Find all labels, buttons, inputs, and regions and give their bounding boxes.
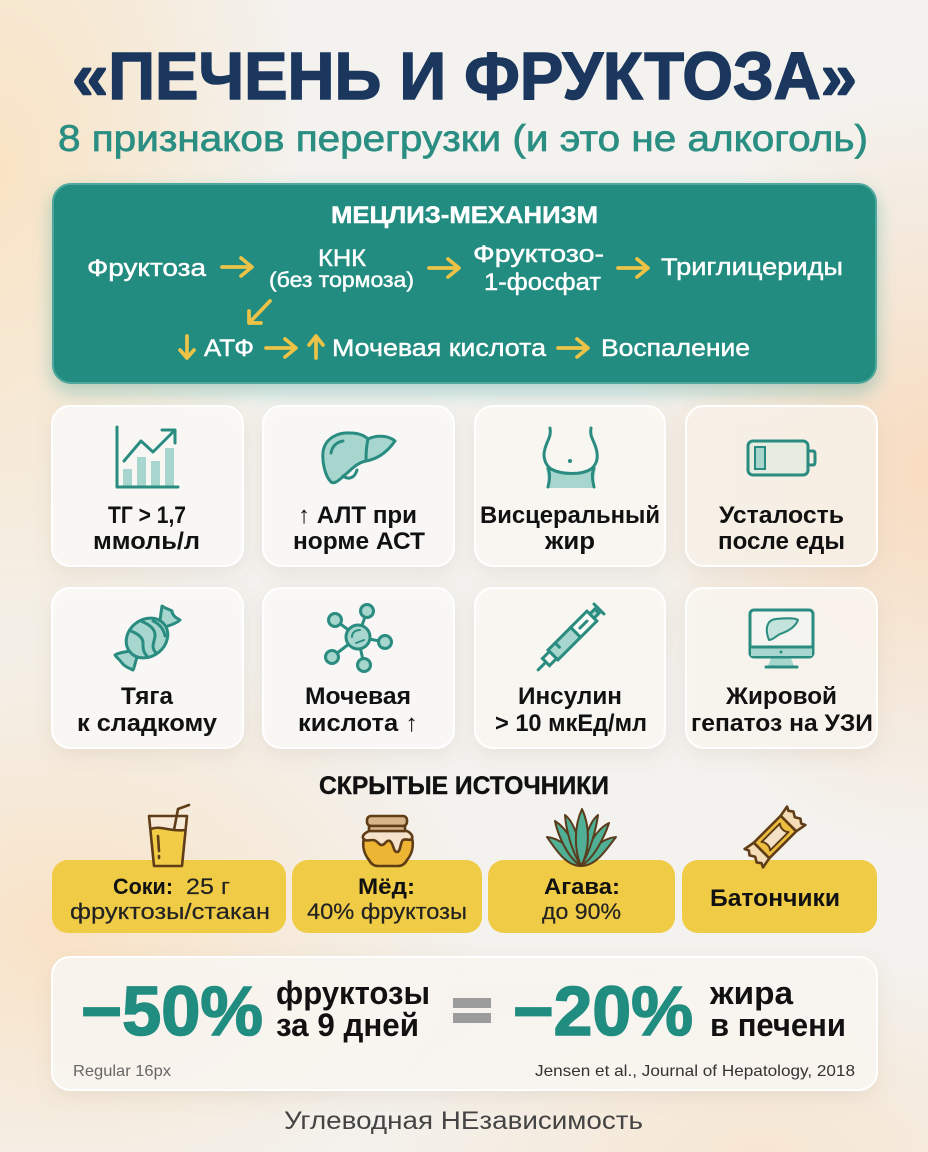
card: fatigue bbox=[686, 406, 877, 566]
arrow bbox=[429, 259, 459, 277]
label: ↑ АЛТ при bbox=[298, 502, 417, 529]
card: ALT bbox=[263, 406, 454, 566]
label: Мочевая bbox=[305, 683, 411, 710]
title: «ПЕЧЕНЬ И ФРУКТОЗА» bbox=[72, 39, 857, 114]
label: к сладкому bbox=[77, 710, 218, 737]
label: Тяга bbox=[121, 683, 174, 710]
note: Regular 16px bbox=[73, 1063, 171, 1080]
label: Жировой bbox=[725, 683, 837, 710]
arrow bbox=[618, 259, 648, 277]
icon: candy bbox=[115, 606, 180, 670]
section heading: hidden sources: СКРЫТЫЕ ИСТОЧНИКИ bbox=[319, 772, 609, 800]
icon: snack bar bbox=[744, 806, 806, 868]
label: Мёд: bbox=[358, 874, 415, 899]
label: 40% фруктозы bbox=[307, 899, 467, 924]
label bbox=[307, 874, 467, 924]
arrow: diagonal down bbox=[249, 301, 270, 323]
label bbox=[691, 683, 873, 737]
icon: honey jar bbox=[363, 816, 413, 866]
stat label: fructose: за 9 дней bbox=[276, 1007, 419, 1043]
label: Усталость bbox=[719, 502, 844, 529]
arrow: uric acid up bbox=[309, 336, 323, 358]
card: triglycerides bbox=[52, 406, 243, 566]
panel heading: МЕЦЛИЗ-МЕХАНИЗМ bbox=[331, 202, 598, 229]
arrow bbox=[266, 339, 296, 357]
card: fatty liver bbox=[686, 588, 877, 748]
label: ТГ > 1,7 bbox=[108, 502, 186, 529]
panel: Mecliz mechanism bbox=[53, 184, 876, 383]
label: Агава: bbox=[544, 874, 620, 899]
label bbox=[93, 502, 200, 555]
icon: ultrasound monitor bbox=[750, 610, 813, 667]
step: fructose: Фруктоза bbox=[87, 255, 207, 282]
step: KHK: КНК bbox=[318, 245, 366, 272]
card: visceral fat bbox=[475, 406, 665, 566]
source: agave bbox=[488, 809, 675, 933]
step: fructose-1-phosphate bbox=[473, 241, 604, 296]
label bbox=[70, 874, 270, 924]
label: Инсулин bbox=[518, 683, 622, 710]
icon: insulin pen bbox=[533, 604, 604, 675]
step: KHK bbox=[269, 245, 414, 292]
icon: growth chart bbox=[117, 427, 178, 487]
step: triglycerides: Триглицериды bbox=[661, 254, 843, 281]
label bbox=[718, 502, 845, 555]
label bbox=[293, 502, 425, 555]
subtitle: 8 признаков перегрузки (и это не алкоголь) bbox=[58, 118, 868, 159]
step: KHK: (без тормоза) bbox=[269, 269, 414, 292]
source: honey bbox=[292, 816, 482, 933]
label: после еды bbox=[718, 528, 845, 555]
arrow: ATP down bbox=[180, 336, 194, 358]
icon: belly bbox=[544, 428, 597, 488]
icon: low battery bbox=[748, 441, 815, 475]
icon: liver bbox=[323, 433, 395, 483]
label: кислота ↑ bbox=[298, 710, 418, 737]
stat: minus 50 percent: −50% bbox=[81, 972, 263, 1050]
source: bars bbox=[682, 806, 877, 933]
stat label: fructose bbox=[276, 975, 430, 1043]
label bbox=[480, 502, 660, 555]
arrow bbox=[222, 258, 252, 276]
icon: juice glass bbox=[149, 805, 189, 866]
arrow bbox=[558, 339, 588, 357]
card: insulin bbox=[475, 588, 665, 748]
label: норме АСТ bbox=[293, 528, 425, 555]
stat: minus 20 percent: −20% bbox=[513, 972, 693, 1050]
stat label: liver fat bbox=[709, 975, 846, 1043]
step: uric acid: Мочевая кислота bbox=[332, 335, 547, 362]
panel: result bbox=[52, 957, 877, 1090]
step: fructose-1-phosphate: Фруктозо- bbox=[473, 241, 604, 268]
step: ATP: АТФ bbox=[204, 335, 254, 362]
label: до 90% bbox=[542, 899, 621, 924]
label: > 10 мкЕд/мл bbox=[495, 710, 647, 737]
card: uric acid bbox=[263, 588, 454, 748]
label bbox=[298, 683, 418, 737]
label: Батончики bbox=[710, 885, 840, 912]
label: гепатоз на УЗИ bbox=[691, 710, 873, 737]
stat label: fructose: фруктозы bbox=[276, 975, 430, 1011]
equals sign bbox=[453, 998, 491, 1023]
icon: agave plant bbox=[547, 809, 616, 866]
label: Соки: bbox=[113, 874, 173, 899]
source: juice bbox=[52, 805, 286, 933]
label bbox=[495, 683, 647, 737]
footer brand: Углеводная НЕзависимость bbox=[284, 1107, 643, 1135]
label: фруктозы/стакан bbox=[70, 899, 270, 924]
label: Висцеральный bbox=[480, 502, 660, 529]
label bbox=[542, 874, 621, 924]
label: ммоль/л bbox=[93, 528, 200, 555]
stat label: liver fat: жира bbox=[709, 975, 793, 1011]
stat label: liver fat: в печени bbox=[710, 1007, 846, 1043]
icon: molecule bbox=[326, 604, 392, 672]
label: жир bbox=[544, 528, 595, 555]
card: sugar craving bbox=[52, 588, 243, 748]
panel background bbox=[53, 184, 876, 383]
label bbox=[77, 683, 218, 737]
label: 25 г bbox=[186, 874, 230, 899]
citation: Jensen et al., Journal of Hepatology, 2018 bbox=[535, 1063, 855, 1080]
step: inflammation: Воспаление bbox=[601, 335, 750, 362]
step: fructose-1-phosphate: 1-фосфат bbox=[484, 269, 601, 296]
